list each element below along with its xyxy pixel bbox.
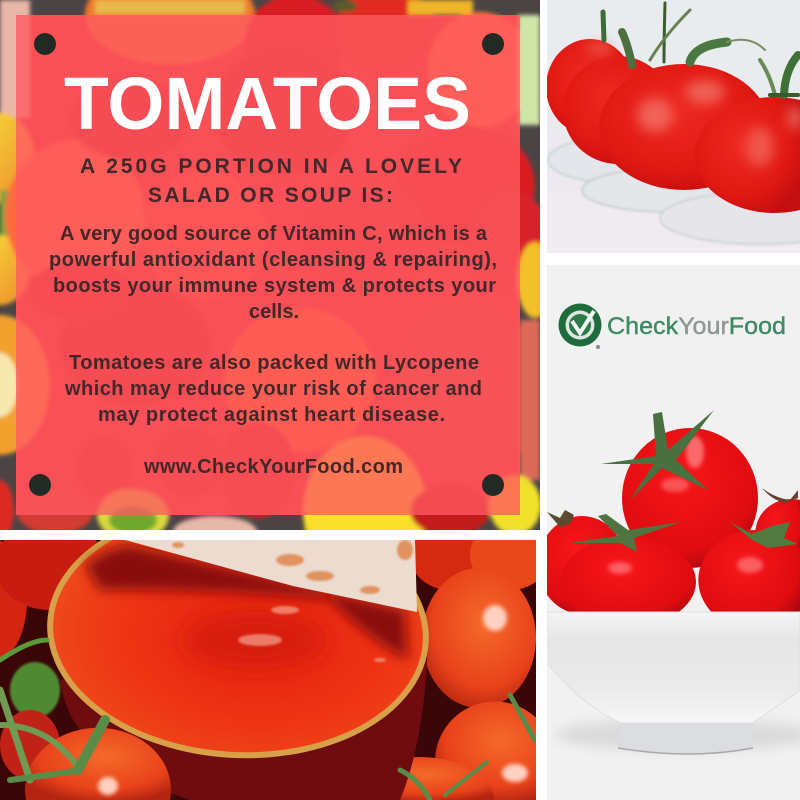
panel: tomato collage photo [0,0,540,530]
text block: lycopene: may protect against heart disease. [98,404,445,426]
corner dot bottom right [482,474,504,496]
tomato back left [547,516,618,612]
subheading [80,155,462,207]
calyx top tomato [601,410,714,500]
website address: www.CheckYourFood.com [143,456,403,478]
panel: logo and bowl background [538,265,800,800]
stems [603,3,798,95]
title: TOMATOES [64,62,471,145]
text block: lycopene [64,352,482,426]
highlights [586,42,800,167]
tomato top [622,428,758,568]
text block: vitamin C: A very good source of Vitamin C, which is a [60,223,488,245]
glass dishes [548,138,800,244]
corner dot bottom left [29,474,51,496]
table floor shadow [555,719,800,751]
text block: lycopene: Tomatoes are also packed with Lycopene [69,352,479,374]
text block: vitamin C: boosts your immune system & protects your [53,275,496,297]
text block: lycopene: which may reduce your risk of cancer and [64,378,482,400]
leaves at left [10,662,60,718]
corner dot top right [482,33,504,55]
subheading: A 250G PORTION IN A LOVELY [80,155,462,178]
tomato second [566,56,653,164]
icon: check mark badge [558,304,602,349]
tomato back right [756,499,800,549]
tomato right [695,97,800,213]
tomato front left [564,538,696,612]
text block: vitamin C: cells. [249,301,299,323]
logo: CheckYourFood [558,304,786,349]
panel: translucent red text box [16,15,520,515]
calyx front right tomato [730,522,798,548]
tomato front right [698,530,800,612]
calyx front left tomato [570,514,681,552]
surrounding tomatoes [0,540,536,800]
tin body [60,640,428,800]
panel: tomatoes on glass dishes photo [546,0,800,253]
text block: vitamin C: powerful antioxidant (cleansing & repairing), [49,249,497,271]
tin rim [47,540,429,758]
logo wordmark: CheckYourFood [607,313,786,340]
tomato lower left [25,728,171,800]
tomatoes in bowl [547,428,800,612]
white bowl [547,612,800,754]
calyx back left tomato [547,510,574,527]
tomato centre [599,64,769,190]
panel: tinned tomatoes photo [0,540,536,800]
vine and leaves [0,640,535,800]
peeled tin lid [125,540,417,612]
calyx back right tomato [762,488,798,503]
tomato highlights [98,605,528,795]
subheading: SALAD OR SOUP IS: [148,184,393,207]
tomato sauce [53,540,423,752]
corner dot top left [34,33,56,55]
tomato back left [547,39,624,128]
text block: vitamin C [49,223,497,323]
